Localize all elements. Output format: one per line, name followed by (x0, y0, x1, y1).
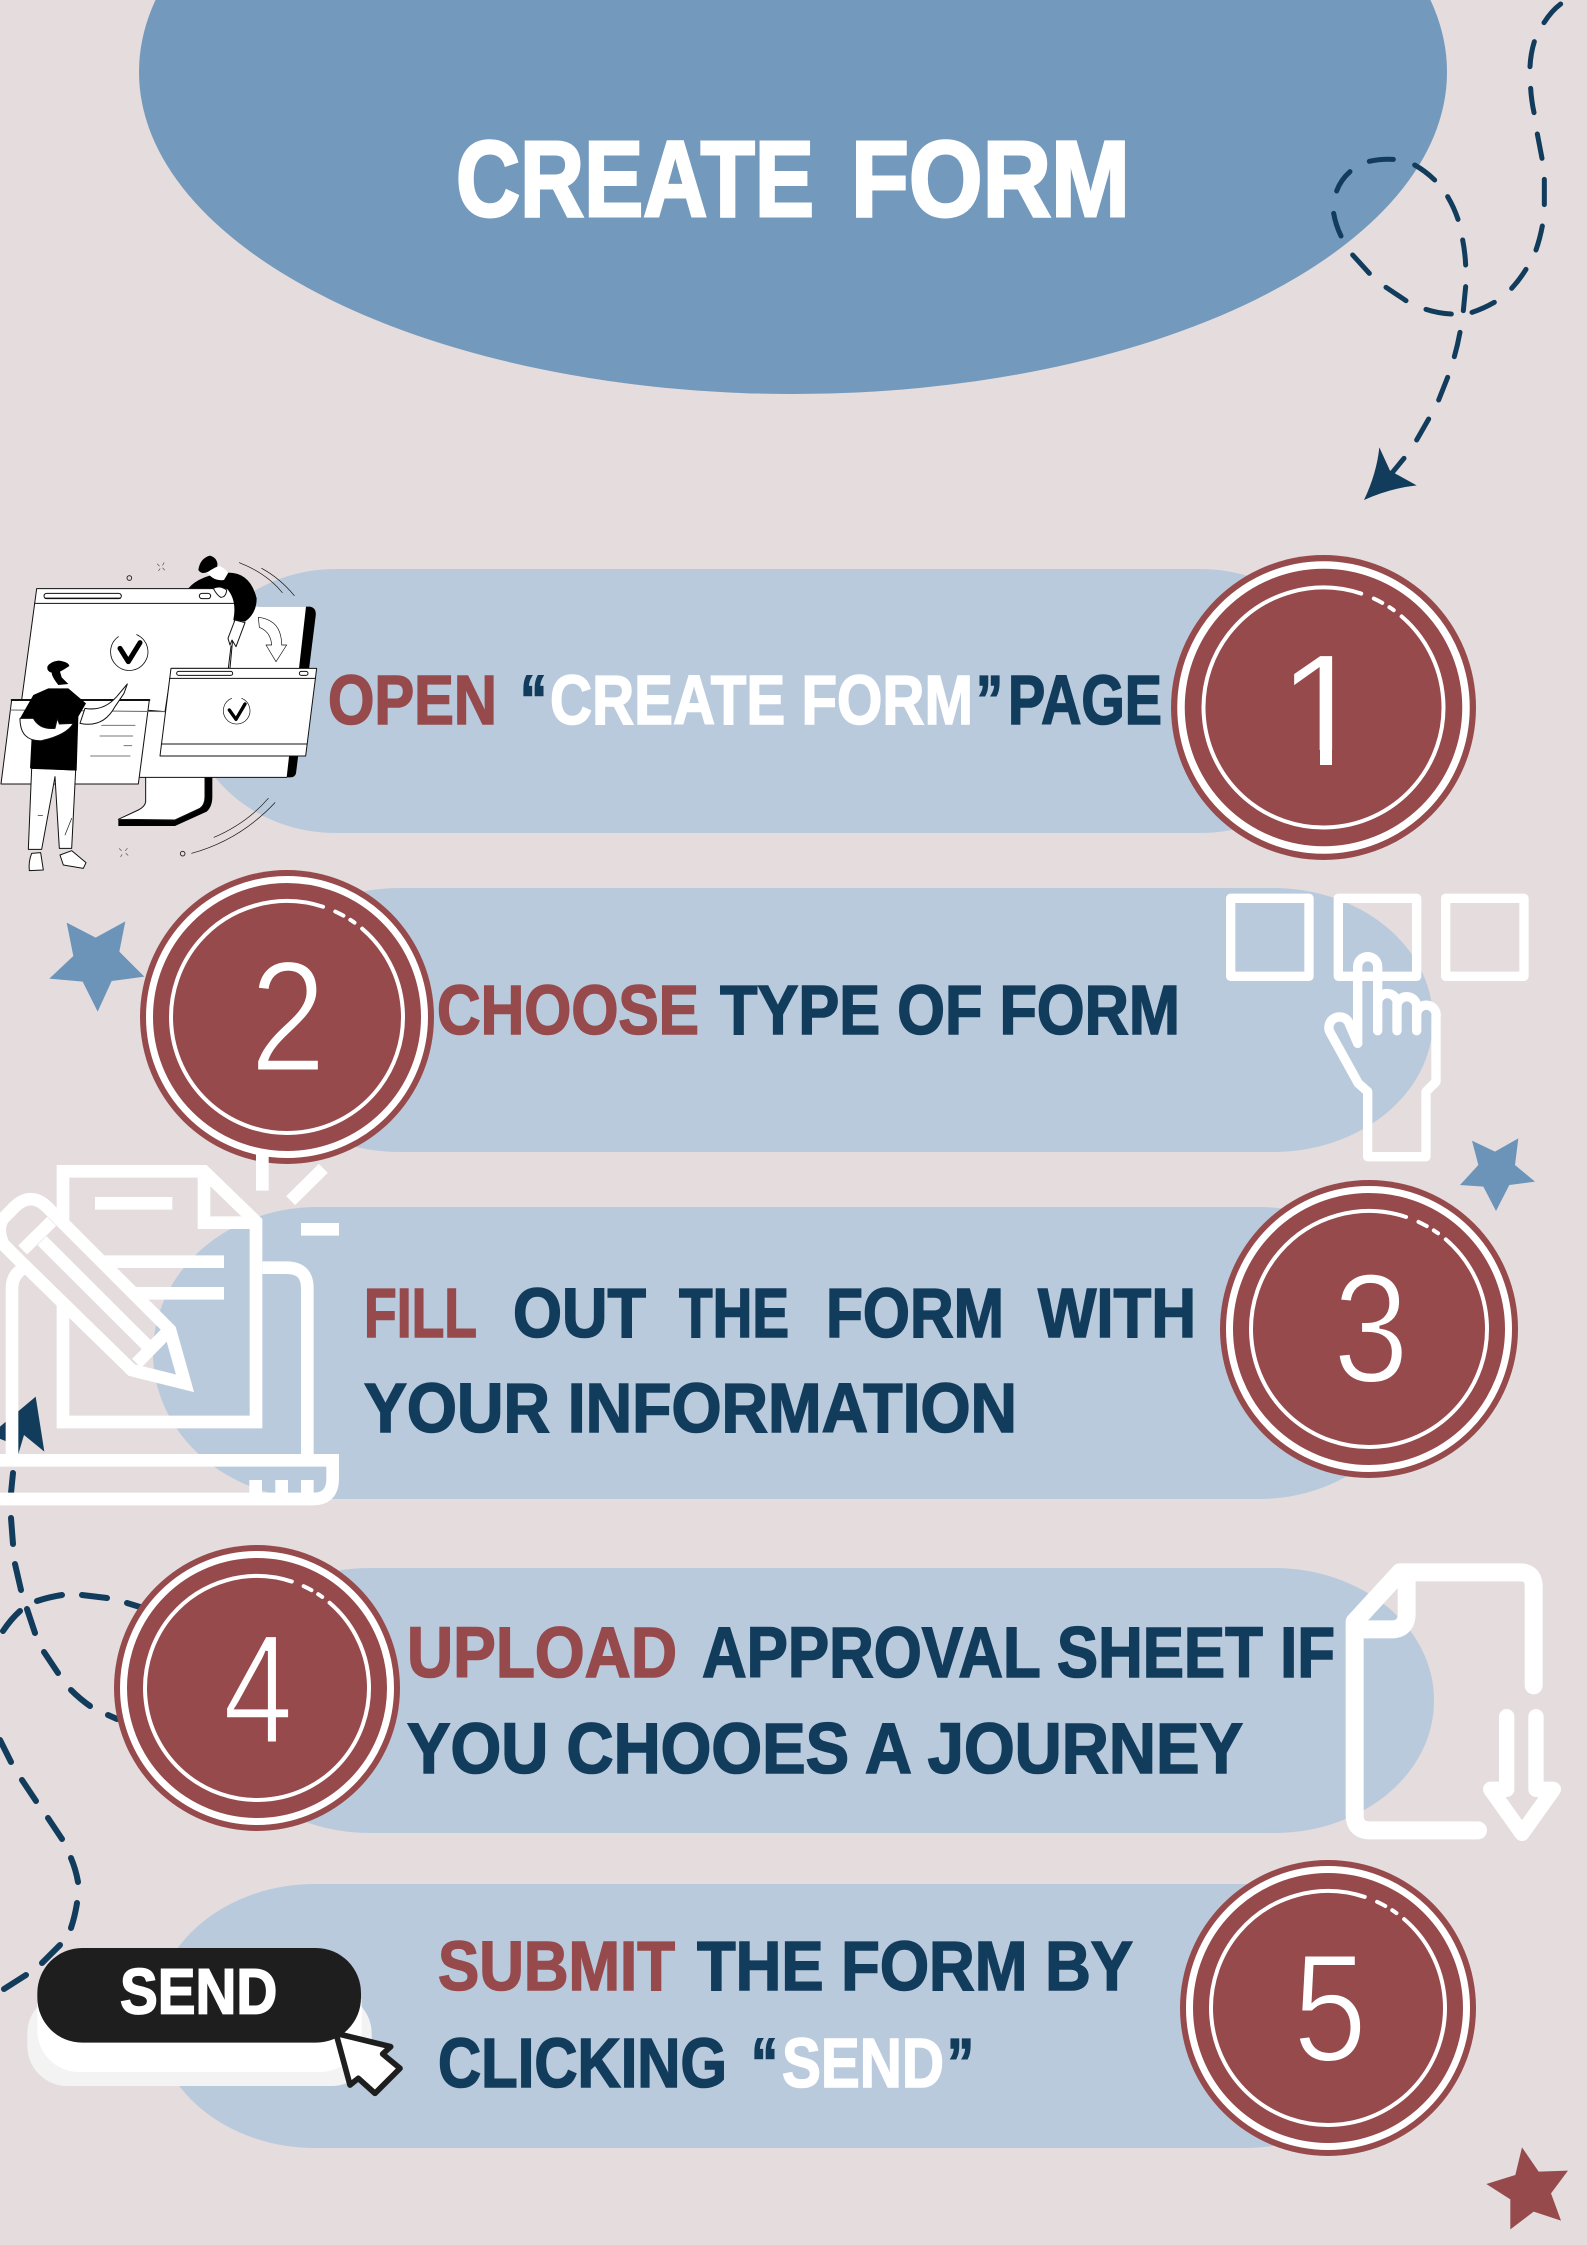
step 2 text (437, 971, 1180, 1049)
step 3 text: OUT (513, 1274, 646, 1352)
step 1 text: PAGE (1008, 661, 1162, 739)
title: FORM (851, 118, 1130, 239)
star: blue right (1460, 1138, 1535, 1211)
step 2 text: CHOOSE (437, 971, 699, 1049)
step 3 text: THE (679, 1274, 789, 1352)
step 1 text: CREATE FORM (550, 661, 973, 739)
step 5 text: SUBMIT (438, 1927, 675, 2005)
step 4 text: YOU CHOOES A JOURNEY (407, 1710, 1243, 1789)
badge: number 2: 2 (250, 929, 326, 1105)
title: CREATE (456, 118, 814, 239)
pill: step 3 (153, 1207, 1423, 1499)
step 4 text: APPROVAL SHEET IF (702, 1614, 1335, 1693)
star: red (1486, 2147, 1568, 2229)
send button with cursor: SEND (120, 1955, 277, 2027)
badge: number 4 (99, 1530, 415, 1846)
step 5 text: THE FORM BY (697, 1927, 1133, 2005)
step 3 text: FORM (826, 1274, 1004, 1352)
step 4 text (407, 1614, 1335, 1789)
badge: number 3 (1203, 1163, 1535, 1495)
badge: number 4: 4 (223, 1603, 293, 1777)
dashed arrow: top right (1334, 4, 1561, 500)
icon: people with browser windows (1, 556, 317, 871)
badge: number 3: 3 (1333, 1242, 1409, 1416)
pill: step 1 (188, 569, 1348, 833)
step 3 text: WITH (1038, 1274, 1196, 1352)
icon: arrow head behind laptop (0, 1397, 44, 1454)
step 5 text (438, 1927, 1133, 2102)
step 5 text: CLICKING (438, 2024, 727, 2102)
step 4 text: UPLOAD (407, 1614, 677, 1693)
icon: hand selecting a box (1231, 898, 1524, 1157)
badge: number 1: 1 (1277, 620, 1369, 803)
pill: step 5 (155, 1884, 1405, 2148)
step 1 text (328, 661, 1162, 739)
dashed arrow: left side (0, 1473, 140, 1989)
star: blue left (49, 921, 144, 1012)
pill: step 2 (240, 888, 1433, 1152)
pill: step 4 (210, 1568, 1434, 1833)
step 3 text: FILL (364, 1274, 477, 1352)
step 1 text: ” (976, 661, 1003, 739)
badge: number 5 (1163, 1843, 1493, 2173)
step 2 text: TYPE OF FORM (720, 971, 1180, 1049)
icon: document, pencil and laptop (0, 1150, 339, 1499)
send button with cursor (27, 1948, 400, 2093)
title (456, 118, 1130, 239)
badge: number 2 (123, 853, 451, 1181)
step 5 text: “ (751, 2024, 778, 2102)
step 5 text: ” (947, 2024, 974, 2102)
step 1 text: “ (520, 661, 547, 739)
icon: document download (1355, 1572, 1553, 1833)
step 3 text: YOUR INFORMATION (364, 1369, 1017, 1447)
badge: number 5: 5 (1293, 1922, 1367, 2094)
step 5 text: SEND (782, 2024, 944, 2102)
badge: number 1 (1154, 538, 1493, 877)
step 1 text: OPEN (328, 661, 497, 739)
header ellipse (139, 0, 1447, 394)
step 3 text (364, 1274, 1196, 1447)
